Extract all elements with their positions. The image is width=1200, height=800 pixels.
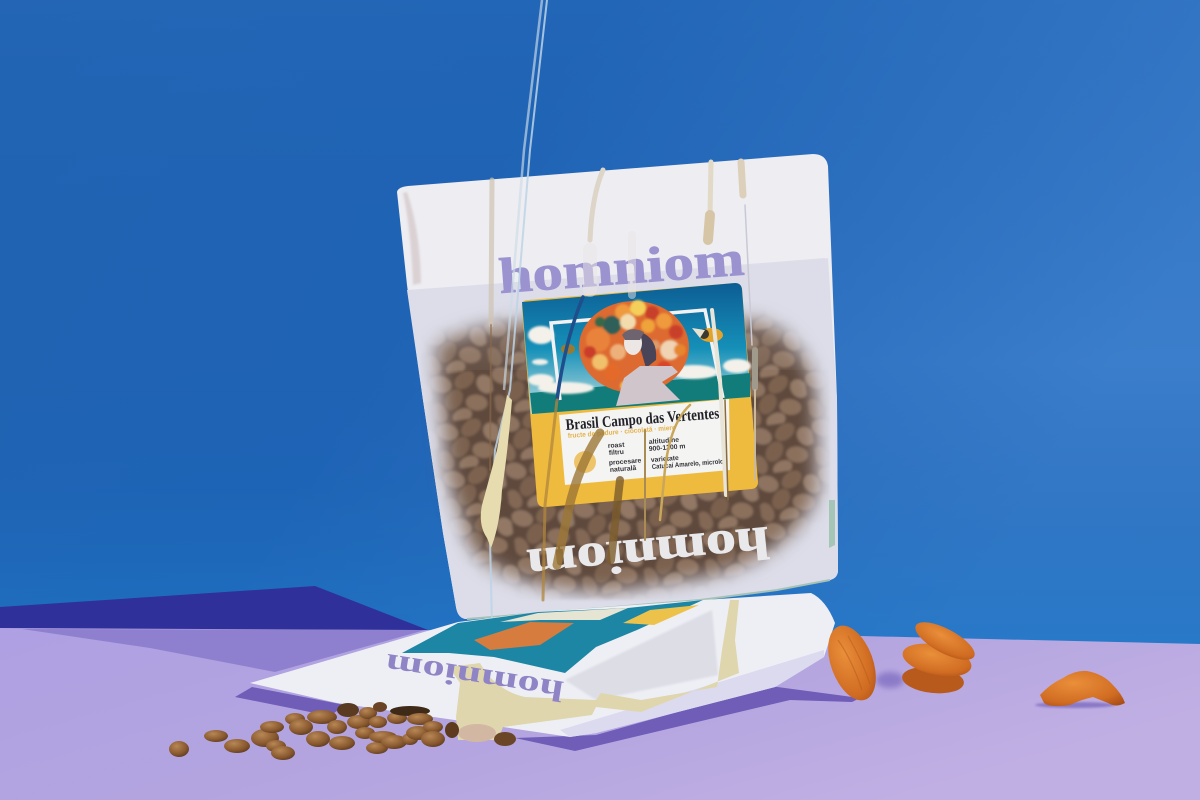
bag window [565, 610, 718, 700]
label title: Brasil Campo das Vertentes [565, 405, 720, 434]
honey drips on bag [490, 162, 755, 600]
spilled coffee beans [169, 702, 516, 760]
object shadows on floor [235, 672, 1115, 751]
sunburst mark [574, 451, 596, 473]
lower bag face [560, 650, 824, 737]
flattened label [402, 600, 703, 673]
label sea [530, 373, 750, 414]
flattened brand text: homniom [383, 647, 566, 708]
stacked apricots [900, 615, 980, 696]
left edge shade [403, 192, 421, 285]
label details: roast [608, 442, 625, 450]
label details: Catucaí Amarelo, microlot [652, 458, 727, 471]
green seam [829, 500, 835, 548]
dried apricots [819, 615, 1125, 707]
bag body [397, 154, 838, 619]
lilac floor [0, 628, 1200, 800]
bee right [692, 328, 723, 342]
clouds [528, 326, 751, 394]
standing coffee bag [397, 154, 838, 619]
label image sky [522, 283, 750, 414]
label details: filtru [609, 449, 624, 457]
brand bottom mirrored: homniom [525, 517, 772, 591]
beans window [420, 300, 830, 600]
bee left [561, 344, 575, 354]
coffee label [522, 283, 758, 507]
label details: altitudine [649, 437, 679, 446]
brand top: homniom [497, 230, 746, 304]
label details: procesare [609, 458, 642, 467]
label details [608, 437, 727, 474]
frosted lower film [407, 258, 838, 619]
white frame [551, 310, 723, 400]
woman figure [616, 329, 680, 406]
white text panel [559, 399, 730, 485]
label card [522, 283, 758, 507]
bag body [250, 593, 835, 737]
bottom edge [467, 580, 830, 619]
label details: 900-1200 m [649, 443, 686, 453]
apricot on the right [1040, 671, 1125, 706]
lying bag [250, 593, 835, 742]
shadow shape on the wall [0, 586, 428, 630]
label details: varietate [651, 455, 679, 464]
umbrella [579, 300, 689, 393]
main honey stream [481, 0, 547, 626]
tasting notes: fructe de pădure · ciocolată · miere [568, 425, 676, 440]
apricot by bag [819, 619, 885, 707]
frost fade over beans [420, 258, 830, 370]
honey puddle [449, 600, 739, 740]
floor shadow band [22, 629, 425, 672]
label details: naturală [610, 465, 637, 474]
